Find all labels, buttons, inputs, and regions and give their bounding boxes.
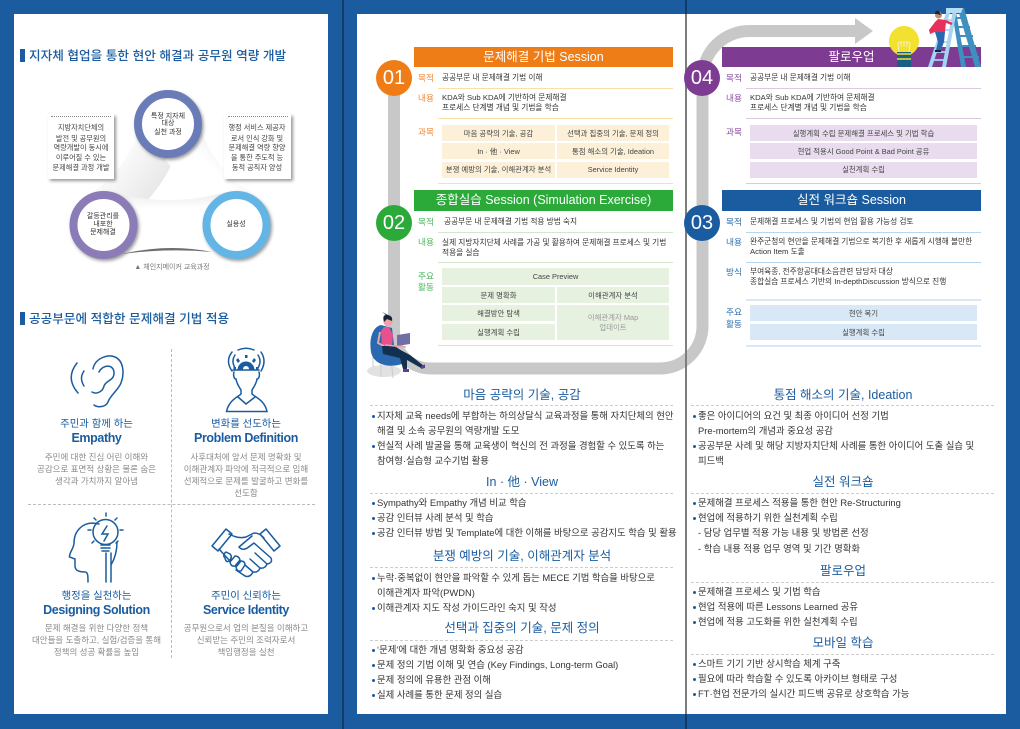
text: empathy: 공감으로 표면적 상황은 물론 숨은 bbox=[37, 464, 156, 474]
grid dividers bbox=[171, 349, 172, 658]
course cells: 분쟁 예방의 기술, 이해관계자 분석 bbox=[446, 165, 551, 174]
text: follow-up section: 현업 적용에 따른 Lessons Learned 공유 bbox=[698, 601, 858, 612]
purpose row: 공공부문 내 문제해결 기법 적용 방법 숙지 bbox=[444, 217, 577, 226]
header: 팔로우업 bbox=[828, 50, 874, 64]
activity cells bbox=[418, 268, 673, 346]
heading: collaboration: 지자체 협업을 통한 현안 해결과 공무원 역량 개발 bbox=[29, 49, 286, 63]
content row bbox=[726, 93, 981, 119]
activity cells: 주요 bbox=[726, 307, 742, 317]
text: mobile learning section: 필요에 따라 학습할 수 있도록 아카이브 형태로 구성 bbox=[698, 673, 897, 684]
content row bbox=[418, 237, 673, 263]
course cells: 실행계획 수립 문제해결 프로세스 및 기법 학습 bbox=[793, 128, 934, 138]
circle label: top: 실천 과정 bbox=[154, 128, 182, 136]
fold line bottom bbox=[685, 714, 687, 729]
icon: handshake bbox=[211, 528, 281, 578]
text: problem definition section: 문제 정의 기법 이해 및 연습 (Key Findings, Long-term Goal) bbox=[377, 659, 618, 670]
text: ideation section: Pre-mortem의 개념과 중요성 공감 bbox=[698, 425, 833, 436]
text: mobile learning section: 모바일 학습 bbox=[812, 636, 873, 650]
activity cells: 실행계획 수립 bbox=[477, 328, 520, 336]
content row: 프로세스 단계별 개념 및 기법을 학습 bbox=[442, 103, 559, 112]
content row: 내용 bbox=[726, 237, 742, 247]
purpose row bbox=[726, 73, 981, 89]
method row: 방식 bbox=[726, 267, 742, 277]
text: empathy section: 마음 공략의 기술, 공감 bbox=[463, 388, 581, 402]
illustration: man on ladder bbox=[928, 8, 981, 67]
session 03 bbox=[684, 190, 981, 347]
circle label: left: 내포한 bbox=[93, 221, 113, 228]
badge 02 bbox=[376, 205, 412, 241]
text: mobile learning section: FT·현업 전문가의 실시간 피드백 공유로 상호학습 가능 bbox=[698, 688, 909, 699]
text box: left: 지방자치단체의 bbox=[58, 123, 104, 132]
purpose row: 목적 bbox=[418, 73, 434, 83]
text: workshop section: 현업에 적용하기 위한 실천계획 수립 bbox=[698, 512, 838, 523]
text box: left: 역량개발이 동시에 bbox=[54, 143, 108, 152]
text: follow-up section: 문제해결 프로세스 및 기법 학습 bbox=[698, 586, 821, 597]
content row: 내용 bbox=[726, 93, 742, 103]
method row bbox=[726, 267, 981, 301]
text: designing solution: 문제 해결을 위한 다양한 정책 bbox=[45, 623, 148, 633]
text: mobile learning section bbox=[691, 635, 995, 701]
text: service identity: Service Identity bbox=[203, 603, 289, 617]
course cells bbox=[418, 125, 673, 184]
text: problem definition: 선제적으로 문제를 발굴하고 변화를 bbox=[184, 476, 308, 486]
text: in-other-view section: Sympathy와 Empathy 개념 비교 학습 bbox=[377, 497, 526, 508]
text: problem definition section bbox=[370, 621, 673, 700]
fold line bbox=[342, 0, 344, 729]
text: follow-up section: 팔로우업 bbox=[820, 564, 866, 578]
course cells: 마음 공략의 기술, 공감 bbox=[464, 128, 533, 138]
content row bbox=[418, 93, 673, 119]
content row: 적용을 실습 bbox=[442, 248, 480, 257]
text: problem definition: 변화를 선도하는 bbox=[211, 419, 281, 430]
text: designing solution: 행정을 실천하는 bbox=[62, 591, 131, 602]
panel: right spread bbox=[357, 14, 1006, 714]
text: designing solution: Designing Solution bbox=[43, 603, 150, 617]
text: designing solution: 정책의 성공 확률을 높임 bbox=[54, 647, 139, 657]
session 02 bbox=[376, 190, 673, 346]
method row: 종합실습 프로세스 기반의 In-depthDiscussion 방식으로 진행 bbox=[750, 277, 946, 286]
circle label: top: 대상 bbox=[162, 120, 174, 127]
illustration: woman with laptop bbox=[367, 312, 425, 378]
header: 종합실습 Session (Simulation Exercise) bbox=[436, 193, 651, 207]
icon: head with bulb bbox=[68, 512, 124, 583]
text box: right: 동적 공직자 양성 bbox=[232, 163, 282, 172]
text: problem definition bbox=[184, 418, 308, 498]
header: 문제해결 기법 Session bbox=[483, 50, 604, 64]
text: empathy bbox=[37, 418, 156, 486]
panel: left page bbox=[14, 14, 328, 714]
text: problem definition section: 문제 정의에 유용한 관점 이해 bbox=[377, 674, 491, 685]
text: service identity: 신뢰받는 주민의 조력자로서 bbox=[197, 635, 295, 645]
text: service identity: 공무원으로서 업의 본질을 이해하고 bbox=[184, 623, 308, 633]
course cells: 실천계획 수립 bbox=[842, 165, 885, 174]
text: in-other-view section: 공감 인터뷰 사례 분석 및 학습 bbox=[377, 512, 494, 523]
fold line top bbox=[685, 0, 687, 14]
text: empathy: 생각과 가치까지 알아냄 bbox=[55, 476, 138, 486]
header bbox=[414, 190, 673, 211]
text: workshop section: - 학습 내용 적용 업무 영역 및 기간 명확화 bbox=[698, 543, 860, 554]
text: problem definition: 사후대처에 앞서 문제 명확화 및 bbox=[190, 452, 302, 462]
activity cells: Case Preview bbox=[533, 272, 578, 281]
icon: head with gear bbox=[226, 348, 268, 412]
content row: 실제 지방자치단체 사례를 가공 및 활용하여 문제해결 프로세스 및 기법 bbox=[442, 238, 666, 247]
content row bbox=[726, 237, 981, 263]
text: problem definition section: 선택과 집중의 기술, 문제 정의 bbox=[444, 621, 600, 635]
course cells: In · 他 · View bbox=[477, 146, 520, 156]
activity cells: 문제 명확화 bbox=[480, 290, 517, 300]
activity cells: 업데이트 bbox=[599, 322, 627, 332]
activity cells: 현안 복기 bbox=[849, 308, 878, 318]
purpose row: 공공부문 내 문제해결 기법 이해 bbox=[442, 73, 542, 82]
course cells: 과목 bbox=[726, 127, 742, 137]
text box: right: 행정 서비스 제공자 bbox=[229, 123, 285, 132]
text: ideation section: 통점 해소의 기술, Ideation bbox=[774, 388, 912, 402]
purpose row: 공공부문 내 문제해결 기법 이해 bbox=[750, 73, 850, 82]
text: empathy: 주민에 대한 진심 어린 이해와 bbox=[45, 452, 148, 462]
text: conflict prevention section: 이해관계자 지도 작성 가이드라인 숙지 및 작성 bbox=[377, 602, 557, 613]
circle label: left: 갈등관리를 bbox=[87, 213, 119, 220]
text box: right bbox=[224, 114, 291, 179]
text: follow-up section: 현업에 적용 고도화를 위한 실천계획 수립 bbox=[698, 616, 858, 627]
diagram: three circles bbox=[69, 90, 274, 263]
course cells bbox=[726, 125, 981, 184]
content row: Action Item 도출 bbox=[750, 247, 805, 256]
activity cells: 활동 bbox=[726, 319, 742, 329]
course cells: 선택과 집중의 기술, 문제 정의 bbox=[567, 128, 659, 138]
content row: KDA와 Sub KDA에 기반하여 문제해결 bbox=[750, 93, 875, 102]
purpose row: 목적 bbox=[418, 217, 434, 227]
course cells: 과목 bbox=[418, 127, 434, 137]
method row: 부여육종, 전주항공대대소음관련 담당자 대상 bbox=[750, 267, 893, 276]
caption: ▲ 체인지메이커 교육과정 bbox=[134, 264, 210, 271]
activity cells: 해결방안 탐색 bbox=[477, 308, 520, 318]
circle label: left bbox=[87, 212, 119, 236]
illustration: lightbulb bbox=[889, 26, 919, 67]
text: conflict prevention section: 누락·중복없이 현안을 파악할 수 있게 돕는 MECE 기법 학습을 바탕으로 bbox=[377, 572, 655, 583]
content row: 내용 bbox=[418, 93, 434, 103]
course cells: 통점 해소의 기술, Ideation bbox=[572, 146, 654, 156]
session 01 bbox=[376, 47, 673, 184]
text: workshop section: - 담당 업무별 적용 가능 내용 및 방법론 선정 bbox=[698, 527, 869, 538]
circle label: left: 문제해결 bbox=[90, 229, 116, 236]
heading: methods: 공공부문에 적합한 문제해결 기법 적용 bbox=[29, 312, 229, 326]
text box: left bbox=[48, 114, 114, 179]
text box: left: 발전 및 공무원의 bbox=[56, 134, 106, 143]
purpose row: 목적 bbox=[726, 217, 742, 227]
content row: 프로세스 단계별 개념 및 기법을 학습 bbox=[750, 103, 867, 112]
text: in-other-view section: 공감 인터뷰 방법 및 Template에 대한 이해를 바탕으로 공감지도 학습 및 활용 bbox=[377, 527, 677, 538]
text: in-other-view section bbox=[370, 475, 677, 538]
activity cells bbox=[726, 305, 981, 347]
badge 02: 02 bbox=[383, 212, 405, 234]
text: empathy section: 현실적 사례 발굴을 통해 교육생이 혁신의 전 과정을 경험할 수 있도록 하는 bbox=[377, 440, 664, 451]
text: designing solution: 대안들을 도출하고, 실험/검증을 통해 bbox=[32, 635, 161, 645]
header bbox=[722, 47, 981, 67]
text: designing solution bbox=[32, 590, 161, 657]
badge 03: 03 bbox=[691, 212, 713, 234]
text: ideation section: 피드백 bbox=[698, 455, 724, 466]
content row: 완주군청의 현안을 문제해결 기법으로 복기한 후 새롭게 시행해 볼만한 bbox=[750, 237, 972, 246]
text box: right: 을 통한 주도적 능 bbox=[231, 153, 283, 162]
text: empathy section: 참여형·실습형 교수기법 활용 bbox=[377, 455, 489, 466]
icon: ear bbox=[70, 355, 124, 408]
text: workshop section bbox=[691, 475, 994, 554]
purpose row bbox=[418, 217, 673, 233]
text: problem definition section: ‘문제’에 대한 개념 명확화 중요성 공감 bbox=[377, 644, 524, 655]
activity cells: 실행계획 수립 bbox=[842, 328, 885, 336]
text: problem definition: 선도함 bbox=[234, 488, 258, 498]
activity cells: 이해관계자 Map bbox=[588, 312, 638, 322]
text: empathy section: 해결 및 소속 공무원의 역량개발 도모 bbox=[377, 425, 519, 436]
text: service identity bbox=[184, 590, 308, 657]
header bbox=[414, 47, 673, 67]
activity cells: 이해관계자 분석 bbox=[588, 290, 638, 300]
text: empathy: 주민과 함께 하는 bbox=[60, 419, 133, 430]
text: empathy section bbox=[370, 388, 674, 466]
course cells: 현업 적용시 Good Point & Bad Point 공유 bbox=[798, 146, 929, 156]
session 04 bbox=[684, 47, 981, 184]
course cells: Service Identity bbox=[588, 165, 638, 174]
activity cells: 활동 bbox=[418, 282, 434, 292]
text: ideation section bbox=[691, 388, 994, 466]
text: follow-up section bbox=[691, 564, 994, 627]
text box: right: 문제해결 역량 향양 bbox=[229, 143, 285, 152]
text: empathy section: 지자체 교육 needs에 부합하는 하의상달식 교육과정을 통해 자치단체의 현안 bbox=[377, 410, 674, 421]
text: ideation section: 좋은 아이디어의 요건 및 최종 아이디어 선정 기법 bbox=[698, 410, 889, 421]
badge 03 bbox=[684, 205, 720, 241]
text box: left: 이루어질 수 있는 bbox=[56, 153, 106, 162]
text: problem definition section: 실제 사례를 통한 문제 정의 실습 bbox=[377, 689, 502, 700]
text: service identity: 책임행정을 실천 bbox=[217, 647, 275, 657]
text: service identity: 주민이 신뢰하는 bbox=[211, 591, 281, 602]
circle label: right: 실용성 bbox=[226, 221, 246, 228]
circle label: top: 특정 지자체 bbox=[151, 112, 185, 120]
badge 01 bbox=[376, 60, 412, 96]
purpose row: 목적 bbox=[726, 73, 742, 83]
text: conflict prevention section: 분쟁 예방의 기술, 이해관계자 분석 bbox=[433, 549, 611, 563]
header: 실전 워크숍 Session bbox=[797, 193, 906, 207]
text: in-other-view section: In · 他 · View bbox=[486, 475, 558, 489]
text: problem definition: 이해관계자 파악에 적극적으로 임해 bbox=[184, 464, 308, 474]
badge 01: 01 bbox=[383, 67, 405, 89]
text: workshop section: 문제해결 프로세스 적용을 통한 현안 Re-Structuring bbox=[698, 497, 901, 508]
text: empathy: Empathy bbox=[72, 431, 122, 445]
purpose row bbox=[418, 73, 673, 89]
text: conflict prevention section: 이해관계자 파악(PWDN) bbox=[377, 587, 475, 598]
centre fold line bbox=[685, 0, 687, 729]
purpose row bbox=[726, 217, 981, 233]
content row: KDA와 Sub KDA에 기반하여 문제해결 bbox=[442, 93, 567, 102]
purpose row: 문제해결 프로세스 및 기법의 현업 활용 가능성 검토 bbox=[750, 217, 913, 226]
text: workshop section: 실전 워크숍 bbox=[812, 475, 873, 489]
badge 04 bbox=[684, 60, 720, 96]
header bbox=[722, 190, 981, 211]
text box: right: 로서 인식 강화 및 bbox=[231, 134, 283, 143]
text: problem definition: Problem Definition bbox=[194, 431, 298, 445]
text: conflict prevention section bbox=[370, 549, 673, 613]
activity cells: 주요 bbox=[418, 271, 434, 281]
badge 04: 04 bbox=[691, 67, 713, 89]
text: mobile learning section: 스마트 기기 기반 상시학습 체계 구축 bbox=[698, 658, 840, 669]
content row: 내용 bbox=[418, 237, 434, 247]
circle label: top bbox=[151, 112, 185, 136]
text box: left: 문제해결 과정 개발 bbox=[53, 163, 109, 172]
text: ideation section: 공공부문 사례 및 해당 지방자치단체 사례를 통한 아이디어 도출 실습 및 bbox=[698, 440, 974, 451]
